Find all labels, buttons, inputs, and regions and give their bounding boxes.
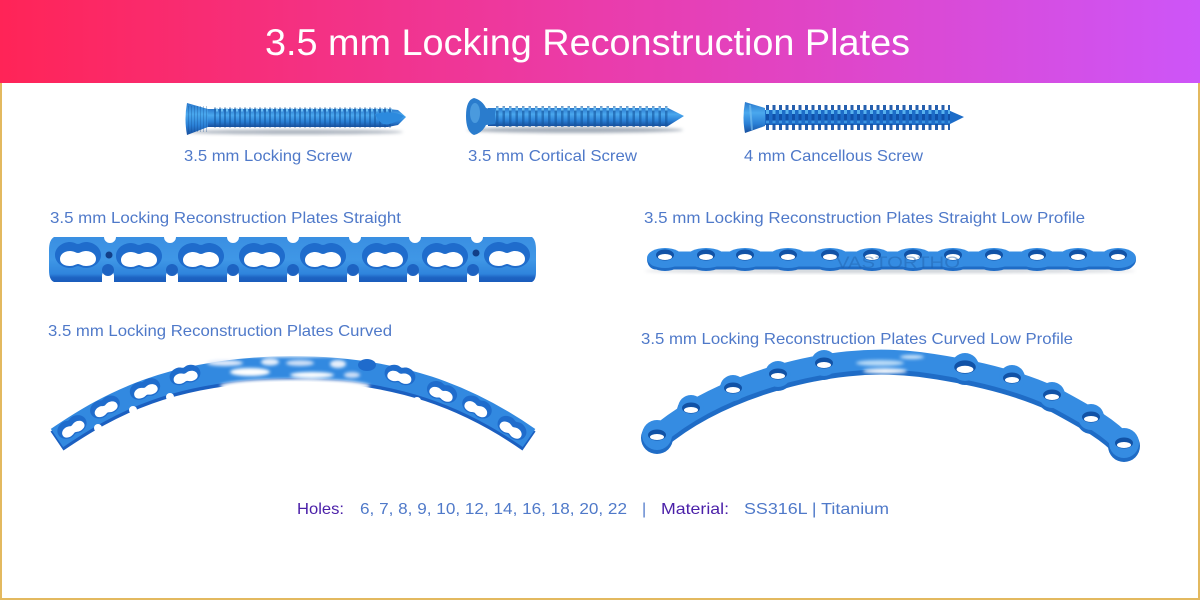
material values: SS316L | Titanium xyxy=(744,501,889,518)
plate: straight locking reconstruction xyxy=(49,237,536,282)
separator: | xyxy=(642,501,646,518)
label: locking screw: 3.5 mm Locking Screw xyxy=(184,148,352,165)
material heading: Material: xyxy=(661,501,729,518)
blurred centre of plate xyxy=(856,355,924,374)
holes heading: Holes: xyxy=(297,501,344,518)
label: curved plate: 3.5 mm Locking Reconstruction Plates Curved xyxy=(48,323,392,340)
plate: curved locking reconstruction xyxy=(54,351,530,444)
label: straight plate: 3.5 mm Locking Reconstruction Plates Straight xyxy=(50,210,402,227)
icon: cancellous screw xyxy=(744,102,964,133)
icon: locking screw xyxy=(186,103,406,135)
header band xyxy=(0,0,1200,83)
plate: curved low profile xyxy=(641,350,1140,462)
label: cortical screw: 3.5 mm Cortical Screw xyxy=(468,148,637,165)
label: cancellous screw: 4 mm Cancellous Screw xyxy=(744,148,923,165)
label: curved low profile plate: 3.5 mm Locking Reconstruction Plates Curved Low Profile xyxy=(641,331,1073,348)
title: 3.5 mm Locking Reconstruction Plates xyxy=(265,22,910,63)
watermark: VASTORTHO xyxy=(836,253,960,272)
plate: straight low profile xyxy=(645,248,1136,273)
label: straight low profile plate: 3.5 mm Locking Reconstruction Plates Straight Low Profile xyxy=(644,210,1085,227)
spec line xyxy=(297,501,889,518)
blurred centre of plate xyxy=(207,351,370,393)
hole sizes: 6, 7, 8, 9, 10, 12, 14, 16, 18, 20, 22 xyxy=(360,501,627,518)
icon: cortical screw xyxy=(466,98,684,135)
